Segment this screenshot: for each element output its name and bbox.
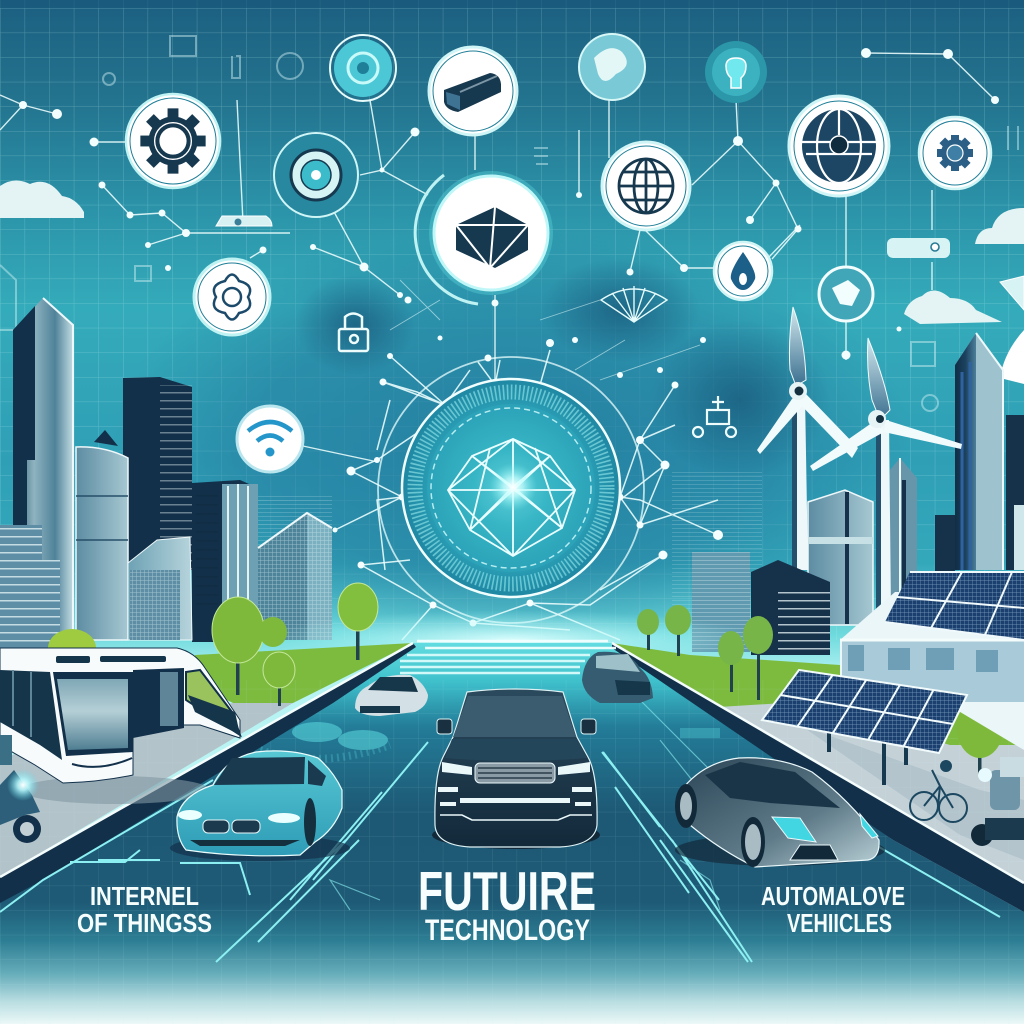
wind turbine two: [810, 338, 962, 612]
tree: [743, 616, 773, 700]
horizon light streaks: [400, 641, 616, 673]
building: center right: [808, 490, 873, 625]
rooftop solar panels: [885, 572, 1024, 640]
network lines upper: [0, 53, 995, 462]
label: internet of things: [77, 881, 212, 938]
icon: bulb: [705, 41, 767, 103]
tree: [665, 605, 691, 656]
bus: [0, 648, 240, 804]
icon: teal chip: [330, 35, 396, 101]
bus side windows: [0, 670, 62, 760]
icon: water drop: [714, 242, 772, 300]
icon: earth: [579, 34, 645, 100]
road: [0, 641, 1024, 1024]
faint background icons: [0, 36, 1018, 411]
building: tall tower: [13, 298, 73, 645]
building: glass mid: [76, 447, 128, 640]
left curb: [0, 643, 416, 903]
left grass and sidewalk: [0, 643, 413, 877]
tree: [338, 583, 378, 660]
icon: puzzle: [819, 267, 873, 321]
building: right edge: [935, 415, 1024, 571]
icon: satellite dish: [601, 286, 667, 322]
building: light grid: [258, 513, 332, 640]
solar house: [840, 572, 1024, 750]
icon: ring node: [194, 259, 270, 335]
tree: [263, 652, 295, 706]
blue car: [170, 751, 350, 861]
label: internet of things: INTERNEL: [90, 881, 199, 911]
tree: [637, 609, 659, 650]
clouds: [0, 180, 1024, 384]
city left: [0, 298, 332, 650]
central network web: [335, 280, 718, 640]
icon: control unit: [693, 396, 736, 437]
central SUV: [432, 689, 600, 849]
building: far right dark: [955, 333, 1003, 570]
icon: small gear: [919, 117, 991, 189]
bus open door: [186, 670, 240, 735]
building: slim: [890, 458, 917, 610]
network nodes upper: [19, 48, 999, 360]
building: background faint: [258, 495, 332, 575]
bus door: [133, 668, 184, 738]
city right: [672, 333, 1024, 655]
horizon glow: [262, 610, 762, 670]
SUV grille: [475, 763, 555, 783]
motorbike: [0, 735, 41, 843]
SUV windshield: [453, 696, 576, 737]
building: dark block: [192, 480, 258, 642]
building: faint towers: [672, 470, 762, 620]
sleek car window: [705, 762, 840, 808]
icon: control pill: [216, 216, 272, 226]
central orb: [402, 379, 620, 597]
icon: globe: [602, 142, 690, 230]
label: automated vehicles: AUTOMALOVE: [761, 881, 905, 911]
right curb: [612, 643, 1024, 912]
right grass and sidewalk: [612, 643, 1024, 883]
bus bumper: [72, 758, 132, 767]
road data pads: [260, 722, 720, 759]
web nodes: [332, 296, 723, 626]
building: left stripes: [0, 525, 60, 650]
bush: [48, 629, 96, 667]
label: automated vehicles: [761, 881, 905, 938]
title: future technology: TECHNOLOGY: [425, 914, 590, 947]
small car right: [582, 652, 653, 703]
icon: central box: [415, 171, 553, 304]
SUV hood: [445, 739, 587, 761]
building: dark tower: [94, 377, 192, 570]
ground solar panel: [762, 670, 967, 785]
wind turbine one: [757, 307, 858, 570]
blue car side window: [308, 760, 326, 786]
icon: wifi: [237, 406, 303, 472]
icon: sensor: [274, 133, 358, 217]
bus roof vents: [56, 656, 166, 663]
SUV bumper line: [440, 815, 592, 820]
blue car grille: [203, 820, 260, 833]
tree: [212, 597, 264, 695]
icon: right pill: [887, 238, 950, 258]
SUV mirrors: [437, 719, 596, 734]
sleek car headlights: [772, 814, 878, 842]
tree: [259, 617, 287, 647]
blue car wheel: [304, 798, 316, 846]
blue car windshield: [214, 757, 305, 785]
icon: gear: [126, 94, 220, 188]
bus window dividers: [13, 670, 31, 737]
trees: [48, 583, 1004, 775]
small car left: [355, 675, 428, 716]
sleek car intake: [790, 845, 838, 860]
icon: padlock: [339, 314, 368, 351]
road light lines: [0, 700, 1000, 962]
SUV lights and trim: [438, 762, 592, 806]
sleek car wheels: [675, 784, 765, 867]
sleek car: [675, 758, 885, 867]
bus windshield: [53, 672, 133, 756]
icon: dark globe: [789, 96, 889, 196]
icon: battery: [429, 47, 517, 135]
cyclist: [910, 761, 967, 822]
title: future technology: [418, 860, 596, 947]
building: teal stripes: [692, 552, 750, 652]
blue car lower intake: [190, 840, 300, 846]
blue car headlights: [178, 810, 300, 823]
tree: [718, 631, 744, 692]
geodesic sphere: [448, 439, 575, 556]
icon: funnel: [1000, 276, 1024, 310]
label: internet of things: OF THINGSS: [77, 908, 212, 938]
tree: [956, 692, 1004, 775]
robot scooter: [971, 757, 1024, 846]
building: dark low: [751, 560, 830, 655]
title: future technology: FUTUIRE: [418, 860, 596, 922]
building: light block: [128, 537, 192, 640]
label: automated vehicles: VEHIICLES: [787, 908, 892, 938]
